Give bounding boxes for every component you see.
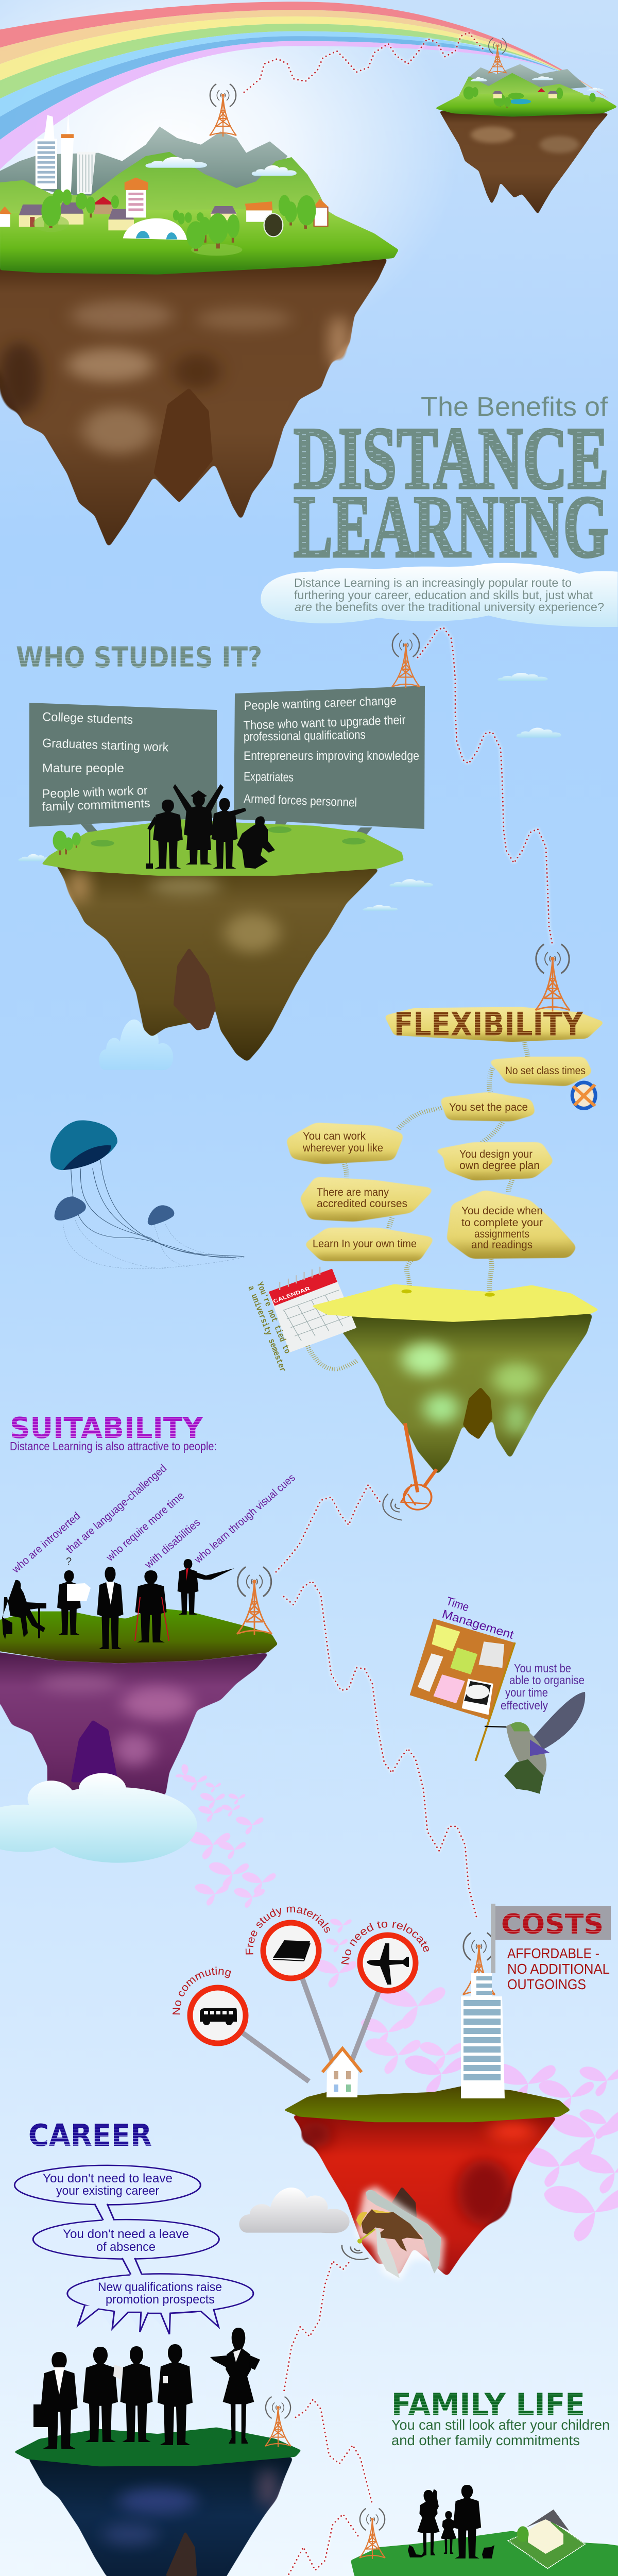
dish arm	[405, 1423, 437, 1492]
cloud under island	[99, 1020, 173, 1070]
label	[253, 1912, 330, 1955]
trees and houses	[464, 87, 596, 108]
sign text: People wanting career change	[244, 694, 397, 713]
dish antenna	[383, 1423, 437, 1520]
flexibility section	[269, 1040, 599, 1475]
sign: free study materials: Free study materials	[245, 1906, 330, 1971]
sign right: Entrepreneurs improving knowledge	[244, 749, 419, 763]
office building	[461, 1973, 505, 2098]
angled suitability labels: who require more time	[104, 1489, 186, 1564]
costs text: OUTGOINGS	[507, 1976, 586, 1992]
blob texts: You set the pace	[449, 1101, 528, 1113]
woman at desk	[2, 1580, 46, 1639]
town houses	[0, 178, 329, 230]
costs sign	[491, 1904, 611, 1973]
title line 1: The Benefits of	[421, 392, 608, 422]
dotted signal path 2	[418, 628, 553, 946]
sign text: College students	[42, 710, 133, 727]
intro cloud: furthering your career, education and skills but, just what	[294, 588, 593, 602]
career silhouettes	[33, 2328, 260, 2449]
career island	[14, 2427, 301, 2576]
calendar	[269, 1267, 356, 1352]
dotted signal path 5	[284, 2261, 349, 2393]
family text	[391, 2417, 610, 2448]
calendar caption: a university semester	[245, 1284, 287, 1374]
alarm clock	[571, 1081, 597, 1110]
worker with shovel	[146, 800, 183, 869]
blob texts: to complete your	[461, 1217, 543, 1229]
time management board	[410, 1619, 515, 1761]
cave	[165, 2531, 197, 2576]
rock body	[28, 2457, 294, 2576]
organise text: your time	[505, 1686, 548, 1699]
book icon	[273, 1940, 310, 1959]
grass top	[0, 209, 399, 275]
grass top	[435, 93, 618, 116]
tower on sign	[392, 633, 420, 688]
family text: and other family commitments	[391, 2432, 580, 2448]
cave	[174, 947, 216, 1030]
island rock body	[0, 258, 388, 548]
house on fence lot	[508, 2510, 585, 2569]
costs text: NO ADDITIONAL	[507, 1961, 610, 1977]
sign right: Armed forces personnel	[244, 792, 357, 810]
intro cloud	[261, 563, 618, 627]
butterflies lower	[405, 2056, 618, 2242]
career bubble text: your existing career	[56, 2184, 159, 2198]
sign left: family commitments	[42, 796, 150, 814]
sign: no need to relocate	[341, 1921, 429, 1994]
costs text	[507, 1945, 610, 1992]
parent with child	[417, 2489, 440, 2555]
sun glow behind rainbow	[0, 0, 458, 371]
mountains and hills	[459, 64, 587, 98]
trees	[33, 189, 316, 256]
sign left: People with work or	[42, 784, 148, 801]
white halo	[355, 2186, 444, 2281]
sign right: Those who want to upgrade their	[243, 713, 406, 733]
blobs	[286, 1057, 593, 1261]
jellyfish	[50, 1121, 244, 1269]
blob texts	[302, 1065, 586, 1251]
costs heading: COSTS	[501, 1909, 604, 1940]
sign right: Expatriates	[244, 770, 294, 785]
sticky notes	[432, 1624, 460, 1651]
organise text: able to organise	[509, 1673, 585, 1687]
kneeling soldier	[237, 816, 275, 869]
blob texts: You decide when	[461, 1205, 543, 1217]
rock body	[55, 863, 380, 1062]
label	[349, 1927, 426, 1965]
hill clouds	[145, 157, 207, 168]
small island top right	[435, 64, 618, 214]
dotted signal path 3	[276, 1485, 382, 1572]
woman gesturing	[210, 2328, 260, 2444]
who studies island	[41, 819, 404, 1070]
dish	[404, 1485, 432, 1510]
man on crutches	[135, 1570, 169, 1642]
man with glass	[158, 2344, 193, 2445]
small bell left	[55, 1196, 86, 1221]
graduate	[173, 784, 224, 865]
green hills	[0, 152, 343, 236]
label	[180, 1975, 242, 2015]
sign right	[234, 686, 425, 829]
sign posts	[242, 1978, 379, 2081]
pegasus	[355, 2186, 444, 2281]
signal arcs	[383, 1494, 402, 1520]
career bubble text: New qualifications raise	[98, 2280, 222, 2294]
title	[294, 392, 609, 576]
time management caption: Time	[444, 1594, 471, 1614]
who silhouettes	[146, 784, 275, 869]
dotted signal path 4	[284, 1581, 477, 1919]
board	[29, 703, 217, 827]
house	[322, 2048, 362, 2097]
angled suitability labels: who learn through visual cues	[192, 1472, 298, 1566]
blob texts: No set class times	[505, 1065, 586, 1077]
grass top	[351, 2531, 618, 2576]
sign left: Mature people	[42, 761, 124, 775]
rock body	[0, 1651, 270, 1795]
small trees	[53, 831, 81, 855]
career bubble text: You don't need a leave	[63, 2227, 189, 2241]
butterflies upper	[171, 1764, 463, 2074]
rock body	[439, 111, 609, 214]
man with rifle	[211, 798, 246, 869]
cloud shape	[261, 563, 618, 627]
back wing	[366, 2190, 441, 2274]
sign: no need to relocate: No need to relocate	[341, 1921, 429, 1964]
costs text: AFFORDABLE -	[507, 1945, 599, 1961]
heading: who studies it: WHO STUDIES IT?	[16, 641, 262, 674]
white dome	[123, 218, 187, 240]
career bubble text	[43, 2172, 222, 2307]
cave	[71, 1720, 118, 1782]
time management caption: Management	[441, 1607, 516, 1641]
board	[234, 686, 425, 829]
signal tower on big island	[210, 84, 236, 137]
blob texts: accredited courses	[317, 1198, 407, 1210]
sign: no commuting	[173, 1967, 248, 2046]
career bubble text: promotion prospects	[106, 2293, 215, 2307]
sign: no commuting: No commuting	[173, 1967, 241, 2033]
front wing	[376, 2225, 400, 2278]
intro cloud: are the benefits over the traditional university experience?	[295, 600, 604, 614]
career bubble text: You don't need to leave	[43, 2172, 173, 2185]
dog left	[408, 2545, 425, 2557]
girl	[441, 2511, 456, 2554]
family island	[351, 2510, 618, 2576]
right sign post	[274, 821, 372, 842]
yellow grass top	[311, 1284, 599, 1322]
suitability subheading: Distance Learning is also attractive to people:	[10, 1439, 217, 1453]
plane icon	[367, 1943, 409, 1985]
grass top	[0, 1608, 278, 1663]
cave	[463, 1387, 492, 1439]
suitability heading: SUITABILITY	[10, 1412, 203, 1445]
man in suit	[97, 1567, 124, 1649]
dish signal arcs	[342, 2245, 368, 2260]
grey cloud	[239, 2188, 350, 2233]
career speech bubbles	[14, 2165, 253, 2334]
blob texts: assignments	[474, 1228, 529, 1240]
sign left: Graduates starting work	[42, 736, 169, 755]
banner shape	[384, 1007, 605, 1042]
intro text: Distance Learning is an increasingly popular route to	[294, 576, 572, 589]
father	[453, 2485, 481, 2558]
flexibility heading: FLEXIBILITY	[394, 1006, 583, 1043]
man with tablet	[83, 2347, 128, 2442]
small sky clouds	[19, 673, 561, 911]
blob texts: There are many	[317, 1187, 389, 1198]
island cave	[153, 388, 213, 503]
bus icon	[200, 2008, 237, 2025]
dog right	[482, 2545, 494, 2558]
angled suitability labels: who are introverted	[9, 1510, 82, 1575]
rock body	[291, 2115, 557, 2278]
left sign post	[81, 824, 107, 842]
dotted signal path 1	[244, 32, 485, 92]
dotted signal path 7	[181, 2514, 358, 2576]
lake	[509, 99, 531, 104]
organise text	[501, 1662, 585, 1712]
blob texts: wherever you like	[302, 1142, 383, 1154]
family tower	[359, 2509, 385, 2559]
blob texts: own degree plan	[459, 1160, 540, 1172]
organise text: effectively	[501, 1699, 548, 1712]
background mountains	[0, 127, 287, 197]
horse body	[362, 2209, 423, 2251]
cave	[388, 2187, 417, 2218]
family silhouettes	[408, 2485, 494, 2558]
career heading: CAREER	[28, 2117, 152, 2153]
cloud under island	[0, 1773, 197, 1863]
man with briefcase	[33, 2352, 78, 2449]
tower on small island	[488, 38, 507, 74]
island body	[325, 1314, 593, 1475]
mane	[356, 2209, 391, 2227]
angled suitability labels: that are language-challenged	[64, 1462, 169, 1556]
rock body	[363, 2573, 618, 2576]
angled suitability labels: with disabilities	[142, 1517, 202, 1571]
small bell right	[148, 1205, 174, 1225]
blob texts: You can work	[303, 1130, 366, 1142]
angled suitability labels	[9, 1462, 298, 1575]
building tower behind	[463, 1933, 495, 1996]
dome arches	[136, 231, 177, 239]
man pointing	[178, 1559, 234, 1615]
family text: You can still look after your children	[391, 2417, 610, 2433]
organise text: You must be	[514, 1662, 571, 1675]
grass top	[41, 819, 404, 876]
suitability silhouettes	[2, 1556, 234, 1649]
main bell	[50, 1121, 117, 1170]
sign right: professional qualifications	[244, 728, 366, 744]
blob texts: and readings	[471, 1239, 533, 1251]
blob texts: Learn In your own time	[313, 1238, 417, 1250]
rainbow	[0, 2, 609, 170]
time management caption	[441, 1594, 516, 1641]
suitability tower	[237, 1567, 272, 1635]
suitability island	[0, 1608, 278, 1863]
sign: free study materials	[245, 1906, 330, 1981]
grass top	[284, 2086, 571, 2122]
big floating island with town	[0, 113, 399, 548]
blob texts: You design your	[459, 1148, 533, 1160]
man with paper	[57, 1556, 91, 1635]
skyscrapers	[36, 113, 96, 194]
sign left	[29, 703, 217, 827]
calendar caption: You're not tied to	[254, 1281, 291, 1355]
photo	[462, 1679, 493, 1715]
springs	[307, 1040, 528, 1369]
career bubble text: of absence	[96, 2240, 156, 2254]
cork board	[410, 1619, 514, 1720]
hummingbird	[485, 1692, 585, 1794]
family heading: FAMILY LIFE	[391, 2387, 585, 2423]
post bases	[91, 826, 366, 846]
man talking	[121, 2346, 152, 2442]
man with paper: ?	[66, 1556, 72, 1567]
tower over banner	[536, 944, 570, 1011]
tentacles	[71, 1160, 244, 1258]
trumpet	[360, 2229, 375, 2240]
dotted signal path 6	[296, 2399, 372, 2504]
pole	[475, 1642, 515, 1761]
grass top	[14, 2427, 301, 2466]
career tower	[265, 2397, 291, 2447]
calendar: CALENDAR	[272, 1285, 312, 1304]
costs island and signs	[239, 2086, 571, 2278]
flexibility banner	[384, 944, 605, 1043]
